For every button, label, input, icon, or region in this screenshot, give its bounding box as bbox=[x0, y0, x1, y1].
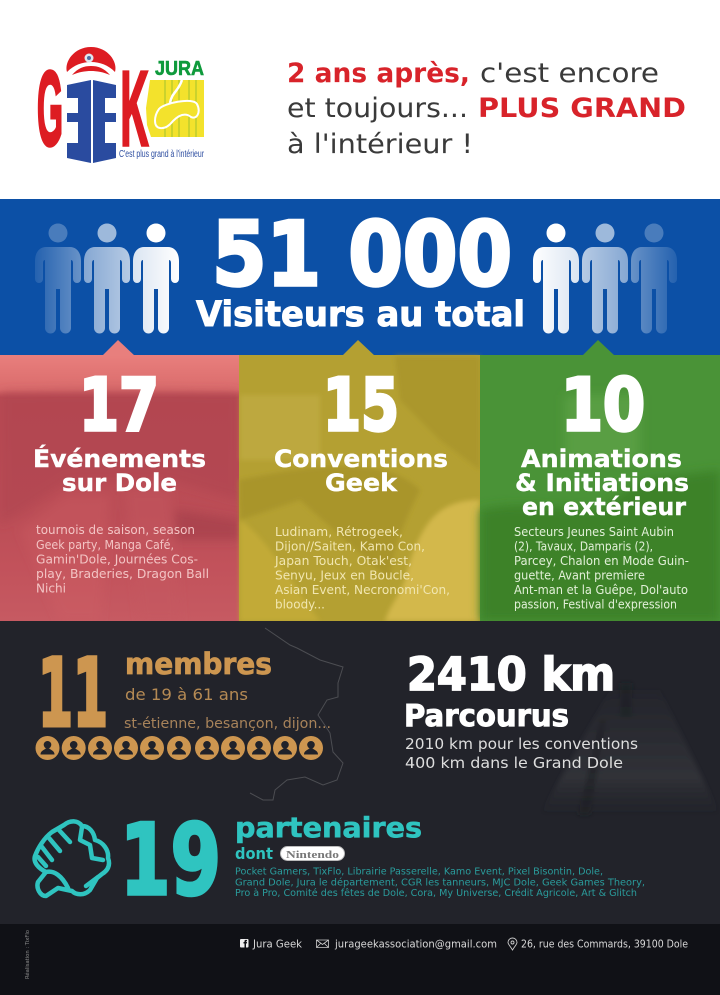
headline: PLUS GRAND bbox=[478, 93, 686, 124]
description: passion, Festival d'expression bbox=[514, 596, 677, 612]
icon: envelope bbox=[316, 940, 328, 948]
description: Nichi bbox=[36, 580, 66, 596]
title: sur Dole bbox=[62, 469, 177, 497]
title: Événements bbox=[33, 444, 206, 473]
visitor count: 51 000 bbox=[212, 203, 512, 306]
logo mirrored E block bbox=[67, 80, 91, 163]
icon: map pin bbox=[508, 938, 517, 950]
description: (2), Tavaux, Damparis (2), bbox=[514, 538, 653, 554]
description bbox=[36, 522, 209, 596]
panel: members bbox=[36, 640, 331, 760]
logo yellow panel with controller bbox=[146, 80, 204, 137]
age range: de 19 à 61 ans bbox=[125, 685, 248, 704]
description: Secteurs Jeunes Saint Aubin bbox=[514, 524, 674, 539]
logo JURA wordmark: JURA bbox=[155, 58, 204, 80]
logo hat bbox=[66, 47, 116, 75]
description: Ant-man et la Guêpe, Dol'auto bbox=[514, 582, 688, 597]
description: Japan Touch, Otak'est, bbox=[274, 553, 412, 568]
description bbox=[274, 524, 450, 612]
members heading: membres bbox=[125, 647, 272, 681]
credit: Réalisation : TixFlo bbox=[24, 930, 31, 979]
road illustration bbox=[540, 683, 720, 815]
panel: dark stats background bbox=[0, 621, 720, 924]
distance details bbox=[405, 735, 638, 772]
description: Parcey, Chalon en Mode Guin- bbox=[514, 553, 689, 568]
panel: partners bbox=[35, 804, 645, 918]
arrow up bbox=[582, 340, 615, 356]
arrow up bbox=[102, 340, 135, 356]
people icons right bbox=[533, 224, 677, 334]
distance label: Parcourus bbox=[404, 699, 569, 734]
panel: visitors band bbox=[0, 199, 720, 356]
number 17: 17 bbox=[79, 363, 159, 447]
title: & Initiations bbox=[515, 469, 689, 497]
title bbox=[274, 445, 448, 497]
number 19: 19 bbox=[120, 804, 221, 918]
panel: events on Dole bbox=[0, 340, 240, 621]
partners list: Grand Dole, Jura le département, CGR les tanneurs, MJC Dole, Geek Games Theory, bbox=[235, 878, 645, 888]
partners list bbox=[235, 866, 645, 899]
headline: 2 ans après, bbox=[287, 58, 470, 89]
description: Ludinam, Rétrogeek, bbox=[275, 524, 403, 539]
Nintendo badge: Nintendo bbox=[286, 849, 340, 861]
address: 26, rue des Commards, 39100 Dole bbox=[521, 938, 688, 950]
panel: distance bbox=[404, 648, 638, 772]
distance details: 400 km dans le Grand Dole bbox=[405, 754, 623, 772]
distance value: 2410 km bbox=[407, 648, 615, 701]
panel: conventions bbox=[239, 340, 480, 621]
cities: st-étienne, besançon, dijon... bbox=[124, 716, 331, 732]
headline: c'est encore bbox=[480, 58, 659, 89]
description: guette, Avant premiere bbox=[514, 568, 645, 582]
logo: Geek Jura bbox=[37, 47, 204, 168]
map of France outline bbox=[250, 628, 343, 800]
title bbox=[515, 445, 689, 521]
title bbox=[33, 444, 206, 497]
panel: outdoor animations bbox=[480, 340, 720, 621]
description: Gamin'Dole, Journées Cos- bbox=[36, 552, 198, 566]
header background bbox=[0, 0, 720, 199]
number 15: 15 bbox=[323, 363, 399, 447]
visitor label: Visiteurs au total bbox=[196, 295, 525, 335]
number 11: 11 bbox=[38, 640, 108, 748]
title: Conventions bbox=[274, 445, 448, 473]
arrow up bbox=[342, 340, 375, 356]
dont label: dont bbox=[235, 844, 273, 863]
description: tournois de saison, season bbox=[36, 522, 195, 537]
facebook name: Jura Geek bbox=[252, 938, 303, 950]
headline: et toujours... bbox=[287, 93, 468, 124]
description: play, Braderies, Dragon Ball bbox=[36, 566, 209, 581]
title: Animations bbox=[521, 445, 682, 473]
footer bbox=[0, 924, 720, 995]
logo E block bbox=[93, 80, 116, 163]
description: Senyu, Jeux en Boucle, bbox=[275, 568, 414, 582]
distance details: 2010 km pour les conventions bbox=[405, 735, 638, 753]
logo: Geek Jura: K bbox=[120, 50, 148, 168]
number 10: 10 bbox=[561, 363, 645, 447]
headline bbox=[287, 58, 686, 160]
email: jurageekassociation@gmail.com bbox=[334, 938, 497, 950]
partners list: Pocket Gamers, TixFlo, Librairie Passerelle, Kamo Event, Pixel Bisontin, Dole, bbox=[235, 866, 603, 878]
description bbox=[514, 524, 689, 612]
description: Geek party, Manga Café, bbox=[36, 537, 174, 552]
description: Dijon//Saiten, Kamo Con, bbox=[275, 538, 425, 554]
Nintendo badge bbox=[280, 846, 344, 861]
icon: facebook bbox=[240, 939, 248, 948]
icon: handshake bbox=[35, 821, 109, 896]
description: bloody... bbox=[275, 596, 325, 612]
headline: à l'intérieur ! bbox=[287, 129, 473, 160]
logo: Geek Jura: G bbox=[37, 50, 63, 168]
title: en extérieur bbox=[522, 493, 686, 521]
logo tagline: C'est plus grand à l'intérieur bbox=[119, 149, 204, 160]
description: Asian Event, Necronomi'Con, bbox=[275, 582, 450, 597]
partners heading: partenaires bbox=[235, 811, 422, 844]
people icons left bbox=[35, 224, 179, 334]
member icons bbox=[36, 736, 323, 760]
title: Geek bbox=[325, 469, 398, 497]
partners list: Pro à Pro, Comité des fêtes de Dole, Cora, My Universe, Crédit Agricole, Art & Glitch bbox=[235, 888, 637, 899]
